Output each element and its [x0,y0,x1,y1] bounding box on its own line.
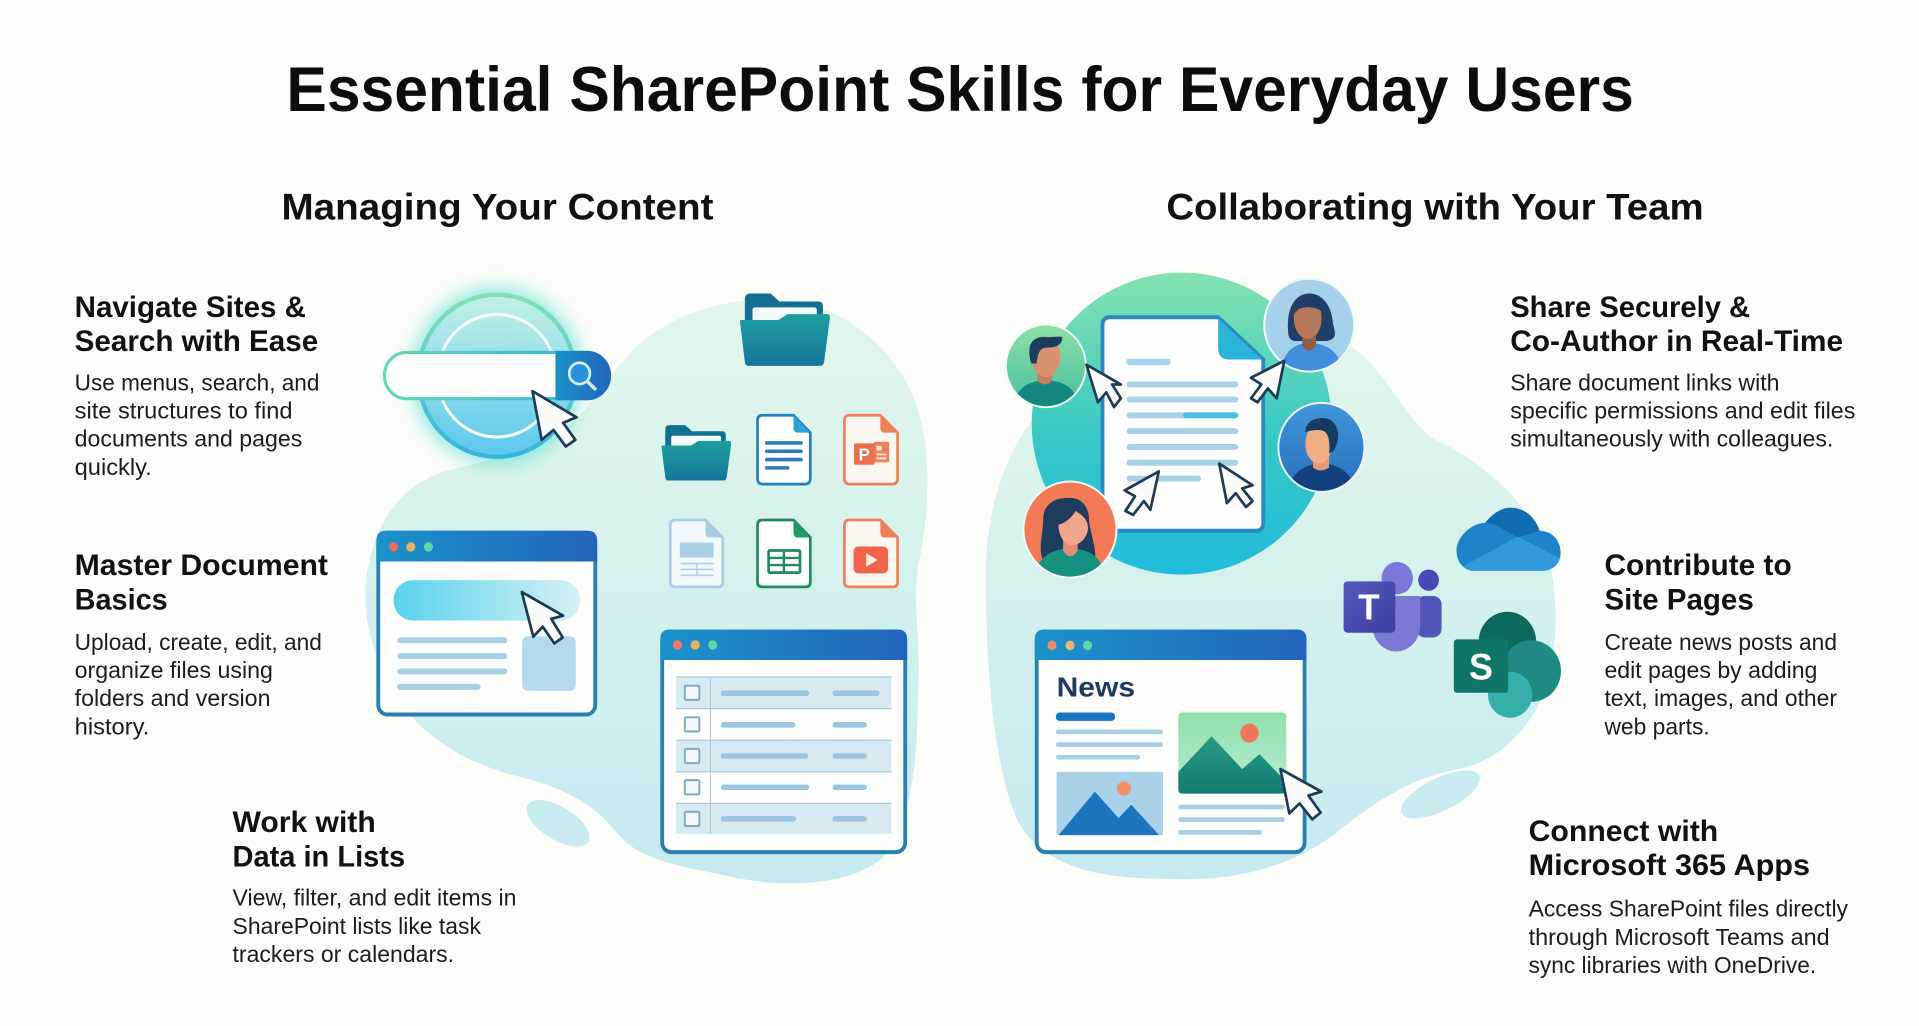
avatar: man blue [1277,402,1365,497]
icon: word document [758,415,810,484]
icon: video document [844,520,898,587]
text block: Share Securely: Co-Author in Real-Time [1510,325,1843,358]
text block: Work with Data in Lists: Data in Lists [233,840,405,873]
text block: Work with Data in Lists: trackers or calendars. [233,941,454,967]
icon: OneDrive cloud [1457,508,1561,571]
blob background left [365,299,927,883]
text block: Contribute to Site Pages: text, images, and other [1604,685,1837,711]
text block: Work with Data in Lists [233,806,516,967]
text block: Master Document Basics: history. [75,713,149,739]
text block: Navigate Sites: Use menus, search, and [75,369,319,395]
icon: large folder [740,294,830,366]
text block: Master Document Basics: folders and version [75,685,270,711]
avatar: woman orange [1023,481,1117,580]
text block: Navigate Sites: documents and pages [75,426,302,452]
text block: Navigate Sites: quickly. [75,454,152,480]
heading: Managing Your Content: Managing Your Content [281,187,714,228]
text block: Connect with Microsoft 365 Apps: Access SharePoint files directly [1529,896,1848,922]
icon: powerpoint document: P [859,445,870,464]
text block: Contribute to Site Pages: web parts. [1603,713,1710,739]
icon: SharePoint: S [1469,646,1493,688]
avatar: woman blue background [1263,278,1355,379]
text block: Navigate Sites: Navigate Sites & [75,291,306,324]
text block: Connect with Microsoft 365 Apps: Microsoft 365 Apps [1529,849,1810,882]
text block: Contribute to Site Pages: Site Pages [1604,583,1754,616]
icon: powerpoint document [844,415,898,484]
icon: excel document [758,520,810,587]
icon: layout document [670,520,723,587]
small blob [1395,761,1486,828]
window: news page: News [1057,671,1135,703]
text block: Connect with Microsoft 365 Apps: Connect with [1529,815,1718,848]
heading: Collaborating with Your Team: Collaborating with Your Team [1166,187,1704,228]
text block: Connect with Microsoft 365 Apps: sync libraries with OneDrive. [1529,952,1816,978]
icon: SharePoint [1454,612,1561,718]
window: list table [660,630,907,852]
text block: Contribute to Site Pages [1603,549,1837,739]
text block: Share Securely: Share Securely & [1510,291,1750,324]
blob background right [986,319,1556,879]
text block: Navigate Sites: site structures to find [75,398,293,424]
text block: Contribute to Site Pages: Contribute to [1604,549,1792,582]
text block: Connect with Microsoft 365 Apps [1529,815,1848,978]
text block: Navigate Sites: Search with Ease [75,325,318,358]
text block: Navigate Sites [75,291,319,480]
document [1103,317,1263,531]
text block: Master Document Basics: Upload, create, edit, and [75,629,322,655]
title: Essential SharePoint Skills for Everyday Users [286,55,1634,125]
text block: Master Document Basics: organize files using [75,657,273,683]
small blob [520,791,597,856]
text block: Work with Data in Lists: SharePoint lists like task [233,913,481,939]
window: document page [376,531,597,715]
icon: Teams: T [1358,587,1380,628]
text block: Work with Data in Lists: View, filter, and edit items in [233,885,516,911]
arrow cursors on document [1086,361,1284,515]
icon: small folder [661,425,731,481]
text block: Share Securely: specific permissions and edit files [1510,398,1855,424]
icon: Teams [1344,562,1442,651]
text block: Master Document Basics: Basics [75,583,168,616]
text block: Contribute to Site Pages: Create news posts and [1604,629,1837,655]
window: news page [1035,630,1321,852]
text block: Master Document Basics [75,549,328,739]
avatar: man green [1005,324,1087,410]
large circle behind document [1032,273,1332,575]
text block: Connect with Microsoft 365 Apps: through Microsoft Teams and [1529,924,1830,950]
text block: Master Document Basics: Master Document [75,549,328,582]
text block: Work with Data in Lists: Work with [233,806,376,839]
text block: Share Securely: Share document links with [1510,369,1779,395]
panel: managing content illustration [365,288,927,883]
text block: Share Securely: simultaneously with colleagues. [1510,426,1833,452]
panel: collaboration illustration [986,273,1561,879]
text block: Contribute to Site Pages: edit pages by adding [1604,657,1817,683]
text block: Share Securely [1510,291,1855,452]
icon: search circle and bar [384,288,611,464]
